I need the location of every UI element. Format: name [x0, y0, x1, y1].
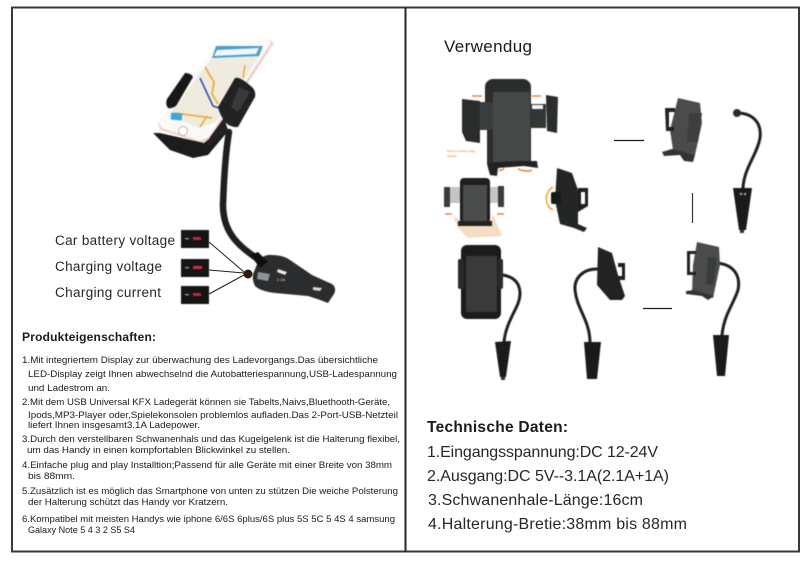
feature 3: um das Handy in einen kompfortablen Blickwinkel zu stellen.: [27, 444, 290, 455]
step line 2: [692, 193, 694, 223]
LED display 1: [181, 230, 209, 248]
feature 2: Ipods,MP3-Player oder,Spielekonsolen problemlos aufladen.Das 2-Port-USB-Netzteil: [28, 409, 398, 420]
feature 6: Galaxy Note 5 4 3 2 S5 S4: [28, 524, 135, 535]
spec 1: 1.Eingangsspannung:DC 12-24V: [427, 444, 658, 461]
car charger: 2.1A: [277, 277, 286, 282]
phone: [158, 39, 274, 143]
spec 4: 4.Halterung-Bretie:38mm bis 88mm: [428, 516, 687, 533]
feature 5: der Halterung schützt das Handy vor Kratzern.: [28, 496, 228, 507]
photo: gooseneck with charger: [733, 109, 760, 233]
photo: large holder with arrows: Press to press image: [447, 149, 476, 153]
feature 4: 4.Einfache plug and play Installtion;Passend für alle Geräte mit einer Breite von 38mm: [22, 459, 392, 470]
photo: holder alone: [662, 98, 702, 162]
label: car battery voltage: Car battery voltage: [55, 233, 175, 248]
car charger: [250, 252, 335, 303]
spec 2: 2.Ausgang:DC 5V--3.1A(2.1A+1A): [427, 468, 669, 485]
connector dot: [244, 270, 252, 278]
feature 3: [22, 433, 400, 455]
photo: holder held in hand: [444, 178, 504, 238]
panel: usage and specs: [427, 37, 760, 533]
feature 3: 3.Durch den verstellbaren Schwanenhals und das Kugelgelenk ist die Halterung flexibel,: [22, 433, 400, 444]
step line 3: [643, 308, 672, 310]
feature 1: [22, 354, 397, 393]
feature 4: bis 88mm.: [28, 470, 75, 481]
heading: usage: Verwendug: [444, 37, 532, 56]
heading: technical data: Technische Daten:: [427, 419, 568, 436]
feature 5: [22, 485, 398, 507]
photo: large holder with arrows: release: [447, 154, 457, 158]
photo: phone holder with charger: [153, 39, 335, 303]
step line 1: [614, 140, 644, 142]
connector lines: [209, 242, 244, 294]
panel: product and features: [22, 39, 400, 535]
feature 2: [22, 396, 398, 430]
LED display 2: [181, 259, 209, 277]
holder clamps: [153, 73, 255, 158]
label: charging voltage: Charging voltage: [55, 259, 162, 274]
label: charging current: Charging current: [55, 285, 161, 300]
feature 6: 6.Kompatibel mit meisten Handys wie iphone 6/6S 6plus/6S plus 5S 5C 5 4S 4 samsung: [22, 513, 395, 524]
feature 2: 2.Mit dem USB Universal KFX Ladegerät können sie Tabelts,Naivs,Bluethooth-Geräte,: [22, 396, 390, 407]
photo: large holder with arrows: [447, 79, 558, 176]
photo: assembled side view: [686, 242, 739, 376]
feature 1: 1.Mit integriertem Display zur überwachung des Ladevorgangs.Das übersichtliche: [22, 354, 378, 365]
feature 1: LED-Display zeigt Ihnen abwechselnd die Autobatteriespannung,USB-Ladespannung: [28, 368, 397, 379]
feature 6: [22, 513, 395, 535]
feature list: [22, 354, 400, 535]
feature 5: 5.Zusätzlich ist es möglich das Smartphone von unten zu stützen Die weiche Polsterung: [22, 485, 398, 496]
centre divider: [404, 7, 406, 552]
feature 4: [22, 459, 392, 481]
feature 1: und Ladestrom an.: [28, 382, 110, 393]
photo: ball joint back view: [546, 168, 588, 232]
spec 3: 3.Schwanenhale-Länge:16cm: [428, 492, 643, 509]
heading: product features: Produkteigenschaften:: [22, 330, 156, 344]
LED display 3: [181, 286, 209, 304]
feature 2: liefert Ihnen insgesamt3.1A Ladepower.: [28, 419, 200, 430]
photo: assembled front view: [458, 245, 520, 380]
voltage labels with LED displays: [55, 230, 252, 304]
technical data list: [427, 444, 687, 533]
photo: assembled back view: [575, 247, 625, 379]
gooseneck: [223, 132, 258, 259]
